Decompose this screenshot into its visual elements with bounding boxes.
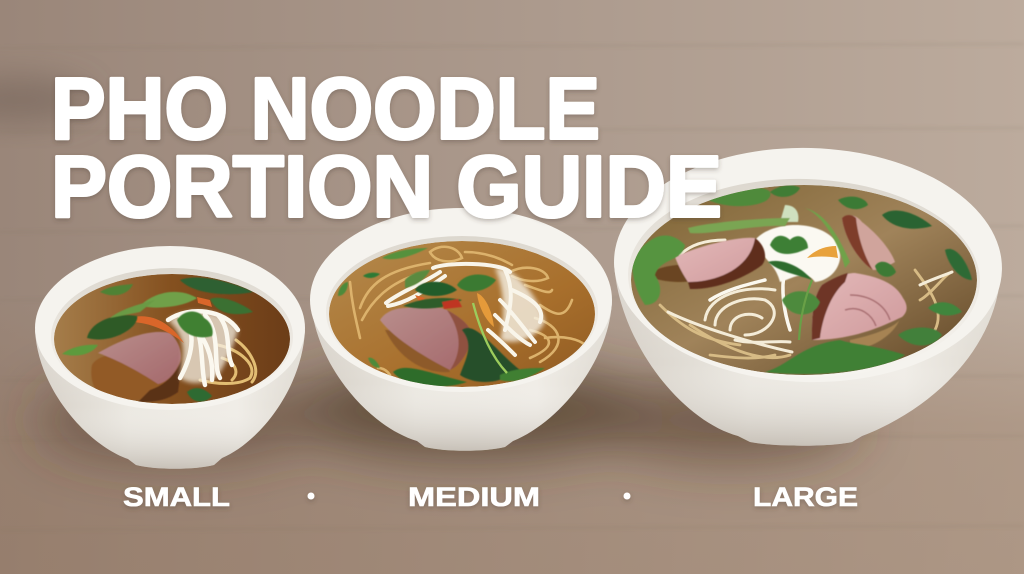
large bowl broth <box>631 185 977 375</box>
large bowl yellow noodles <box>660 270 950 358</box>
title <box>51 60 722 236</box>
small bowl body <box>35 330 305 469</box>
large bowl white noodle mound <box>755 225 840 282</box>
title: PHO NOODLE <box>51 60 600 158</box>
small bowl white noodles <box>168 311 238 383</box>
small bowl broth <box>54 274 290 404</box>
medium bowl rim <box>310 208 612 392</box>
medium bowl white noodles <box>495 268 545 342</box>
small bowl herbs <box>62 277 253 403</box>
medium bowl herbs <box>338 248 545 387</box>
small bowl orange garnish <box>130 316 184 343</box>
large bowl soup <box>631 185 977 375</box>
small bowl yellow noodles <box>200 340 256 384</box>
large bowl rim <box>611 143 1005 387</box>
medium bowl body <box>311 300 612 451</box>
separator dot <box>624 492 630 500</box>
separator dot <box>308 492 314 500</box>
label: medium: MEDIUM <box>408 482 540 512</box>
table shadows under bowls <box>35 364 860 462</box>
large bowl body <box>614 262 1001 446</box>
small bowl rim <box>35 246 305 410</box>
medium bowl yellow noodles <box>350 247 585 375</box>
label: large: LARGE <box>753 482 858 512</box>
small bowl beef <box>91 332 182 402</box>
size labels <box>123 482 858 512</box>
large bowl orange garnish <box>807 246 838 258</box>
large bowl <box>611 143 1005 446</box>
medium bowl soup <box>329 241 595 387</box>
small bowl soup <box>54 274 290 404</box>
medium bowl broth <box>329 241 595 387</box>
small bowl <box>35 246 305 469</box>
label: small: SMALL <box>123 482 230 512</box>
medium bowl orange garnish <box>477 293 494 327</box>
large bowl white noodles <box>668 240 952 352</box>
large bowl herbs <box>632 185 972 374</box>
title: PORTION GUIDE <box>51 138 722 236</box>
medium bowl beef <box>380 306 472 372</box>
medium bowl <box>310 208 612 451</box>
large bowl beef <box>645 215 907 350</box>
